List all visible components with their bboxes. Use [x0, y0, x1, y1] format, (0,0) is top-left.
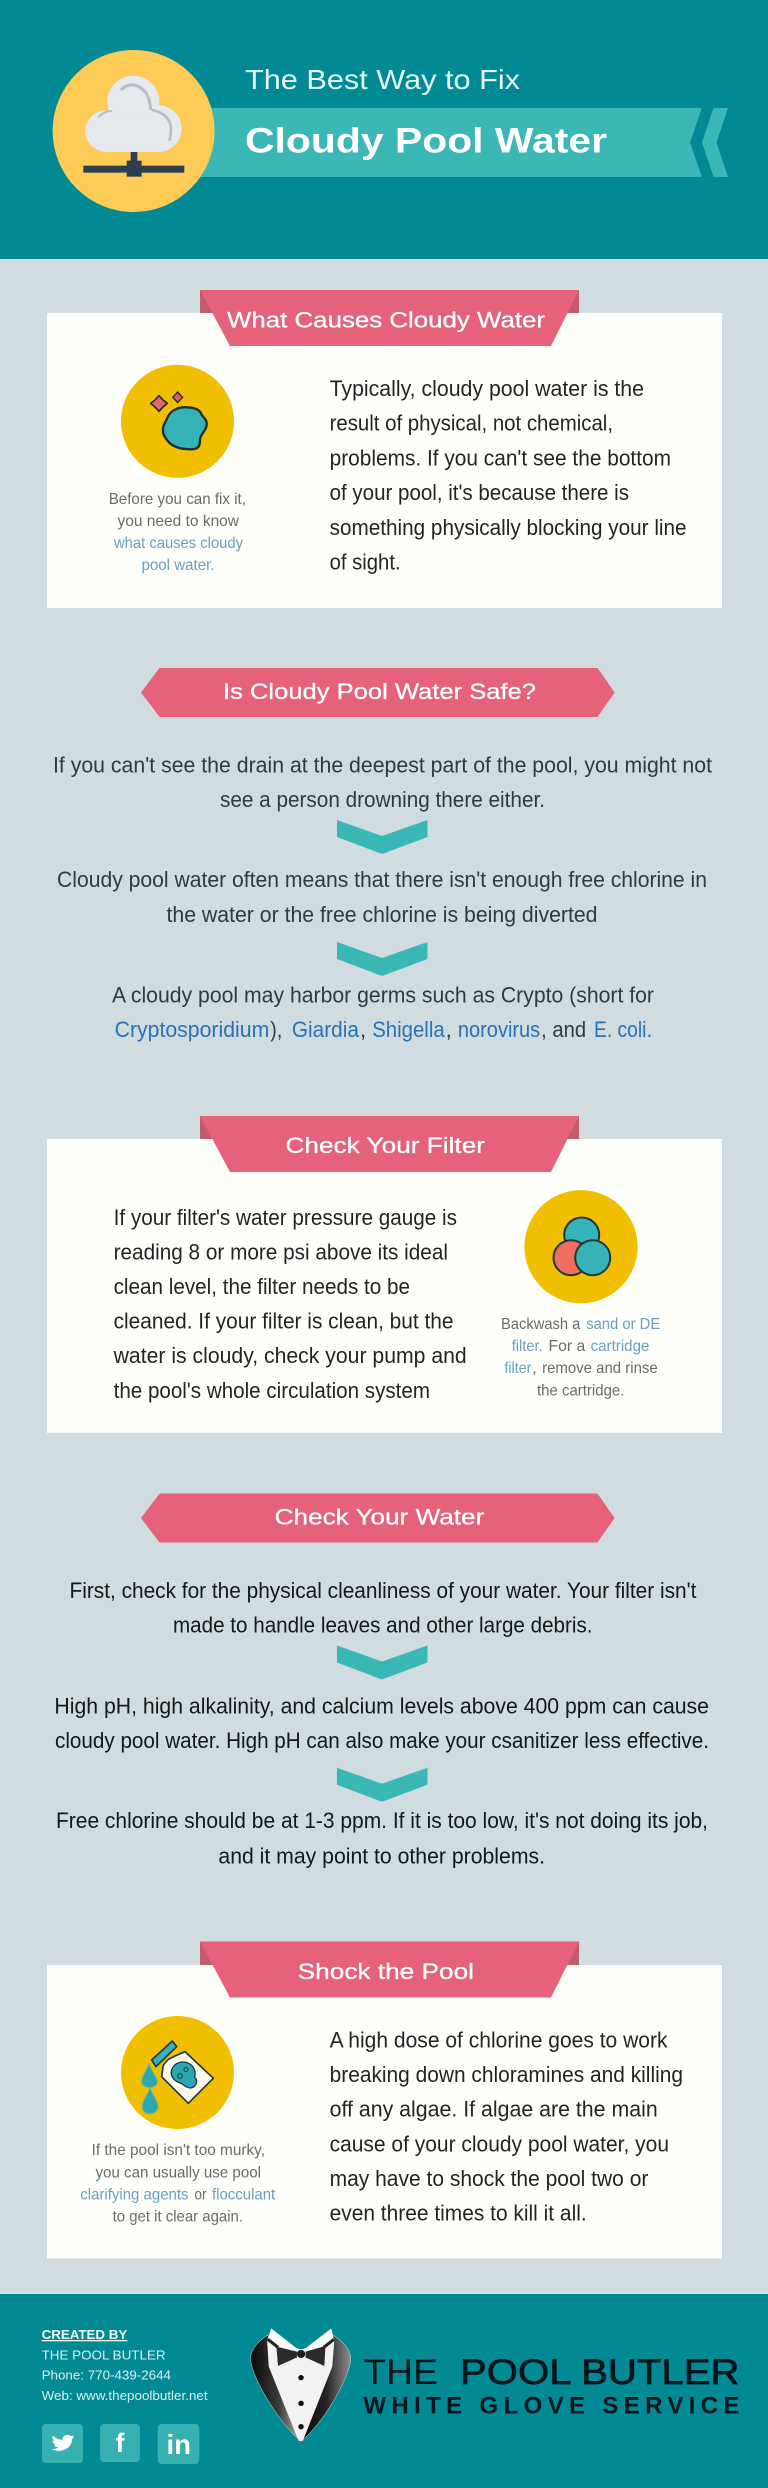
icon: linkedin: in — [166, 2429, 191, 2460]
icon caption — [109, 491, 246, 574]
paragraph one — [53, 753, 712, 812]
logo: tuxedo — [251, 2328, 351, 2441]
icon: particle blob — [121, 365, 234, 478]
body text: water is cloudy, check your pump and — [113, 1343, 467, 1368]
paragraph two: Cloudy pool water often means that there isn't enough free chlorine in — [57, 867, 707, 892]
body text: of sight. — [330, 549, 401, 574]
icon caption — [501, 1316, 660, 1400]
paragraph three: A cloudy pool may harbor germs such as Crypto (short for — [112, 983, 654, 1008]
panel: is cloudy pool water safe — [53, 668, 712, 1042]
icon: filter balls — [524, 1190, 638, 1303]
icon caption: filter. — [512, 1338, 543, 1355]
icon caption: If the pool isn't too murky, — [92, 2142, 265, 2159]
ribbon heading: Shock the Pool — [298, 1959, 474, 1984]
paragraph two: the water or the free chlorine is being diverted — [166, 902, 598, 927]
icon: twitter — [42, 2424, 83, 2463]
icon caption: pool water. — [142, 557, 214, 574]
arrow: chevron down — [337, 820, 428, 854]
icon: cloud network — [53, 50, 215, 212]
panel: check your filter — [47, 1116, 722, 1433]
logo wordmark: THE — [363, 2353, 438, 2392]
body text: may have to shock the pool two or — [330, 2166, 648, 2191]
body text: even three times to kill it all. — [330, 2200, 587, 2225]
icon caption: the cartridge. — [537, 1383, 624, 1400]
paragraph three: Shigella — [372, 1017, 445, 1042]
icon caption — [80, 2142, 276, 2225]
arrow: chevron down — [337, 942, 428, 976]
body text: cleaned. If your filter is clean, but the — [114, 1309, 453, 1334]
paragraph three: , and — [541, 1017, 586, 1042]
creator details — [42, 2327, 208, 2403]
icon caption: Before you can fix it, — [109, 491, 246, 508]
paragraph one: First, check for the physical cleanliness of your water. Your filter isn't — [70, 1578, 696, 1603]
body text: clean level, the filter needs to be — [114, 1274, 410, 1299]
paragraph three — [56, 1808, 708, 1868]
icon caption: what causes cloudy — [113, 535, 243, 552]
creator details: Web: www.thepoolbutler.net — [42, 2388, 208, 2403]
icon: chlorine bottle — [121, 2016, 234, 2129]
body text — [330, 376, 687, 574]
banner ribbon — [200, 108, 702, 177]
paragraph three: Giardia — [292, 1017, 360, 1042]
banner chevron — [702, 108, 728, 177]
logo wordmark: WHITE GLOVE SERVICE — [363, 2392, 740, 2419]
paragraph one: see a person drowning there either. — [220, 787, 545, 812]
paragraph two — [57, 867, 707, 927]
icon caption: you can usually use pool — [96, 2164, 261, 2181]
panel: check your water — [54, 1494, 709, 1868]
paragraph three: , — [446, 1017, 452, 1042]
logo wordmark: POOL BUTLER — [460, 2353, 740, 2392]
icon: facebook — [100, 2424, 140, 2462]
body text: the pool's whole circulation system — [114, 1378, 430, 1403]
icon caption: filter — [504, 1360, 532, 1377]
paragraph two: cloudy pool water. High pH can also make your csanitizer less effective. — [55, 1728, 709, 1753]
paragraph three: E. coli — [594, 1017, 646, 1042]
paragraph three: norovirus — [458, 1017, 540, 1042]
body text: If your filter's water pressure gauge is — [114, 1205, 457, 1230]
arrow: chevron down — [337, 1768, 428, 1802]
paragraph two — [54, 1693, 709, 1753]
panel: shock the pool — [47, 1942, 722, 2258]
body text — [113, 1205, 467, 1403]
creator details: Phone: 770-439-2644 — [42, 2368, 171, 2383]
paragraph two: High pH, high alkalinity, and calcium levels above 400 ppm can cause — [54, 1693, 709, 1718]
creator details: CREATED BY — [42, 2327, 128, 2342]
paragraph three: ), — [270, 1017, 282, 1042]
paragraph three — [112, 983, 654, 1042]
icon caption: sand or DE — [586, 1316, 660, 1333]
body text: A high dose of chlorine goes to work — [330, 2027, 668, 2052]
ribbon heading: Check Your Filter — [286, 1133, 486, 1158]
body text — [330, 2027, 683, 2225]
icon caption: Backwash a — [501, 1316, 580, 1333]
hexagon heading: Check Your Water — [275, 1504, 485, 1529]
body text: off any algae. If algae are the main — [330, 2097, 658, 2122]
hexagon heading: Is Cloudy Pool Water Safe? — [223, 679, 536, 704]
logo wordmark — [363, 2353, 740, 2419]
icon: linkedin — [158, 2424, 199, 2464]
paragraph three: Cryptosporidium — [115, 1017, 269, 1042]
paragraph one — [70, 1578, 696, 1638]
icon caption: , — [532, 1360, 537, 1377]
heading line one: The Best Way to Fix — [245, 64, 520, 95]
paragraph three: Free chlorine should be at 1-3 ppm. If it is too low, it's not doing its job, — [56, 1808, 708, 1833]
icon caption: you need to know — [118, 513, 239, 530]
creator details: THE POOL BUTLER — [42, 2347, 166, 2362]
icon caption: For a — [548, 1338, 585, 1355]
icon caption: remove and rinse — [542, 1360, 658, 1377]
body text: cause of your cloudy pool water, you — [330, 2131, 669, 2156]
hexagon heading — [141, 1494, 615, 1542]
ribbon heading — [200, 290, 579, 346]
body text: of your pool, it's because there is — [330, 480, 629, 505]
ribbon heading — [200, 1942, 579, 1998]
icon caption: flocculant — [212, 2186, 276, 2203]
body text: reading 8 or more psi above its ideal — [114, 1240, 448, 1265]
hexagon heading — [141, 668, 615, 717]
main title: Cloudy Pool Water — [245, 122, 607, 160]
icon caption: cartridge — [591, 1338, 649, 1355]
arrow: chevron down — [337, 1646, 428, 1680]
icon caption: clarifying agents — [80, 2186, 188, 2203]
ribbon heading: What Causes Cloudy Water — [227, 308, 546, 332]
ribbon heading — [200, 1116, 579, 1172]
icon caption: to get it clear again. — [113, 2208, 243, 2225]
body text: something physically blocking your line — [330, 515, 687, 540]
footer panel — [0, 2292, 768, 2488]
header panel — [0, 0, 768, 259]
paragraph three: , — [360, 1017, 366, 1042]
panel: what causes cloudy water — [47, 290, 722, 608]
body text: problems. If you can't see the bottom — [330, 445, 671, 470]
paragraph one: made to handle leaves and other large debris. — [173, 1613, 592, 1638]
icon caption: or — [194, 2186, 207, 2203]
body text: Typically, cloudy pool water is the — [330, 376, 644, 401]
paragraph one: If you can't see the drain at the deepest part of the pool, you might not — [53, 753, 712, 778]
icon: facebook: f — [116, 2428, 126, 2458]
paragraph three: . — [646, 1017, 653, 1042]
body text: result of physical, not chemical, — [330, 411, 613, 436]
body text: breaking down chloramines and killing — [330, 2062, 683, 2087]
paragraph three: and it may point to other problems. — [218, 1843, 545, 1868]
